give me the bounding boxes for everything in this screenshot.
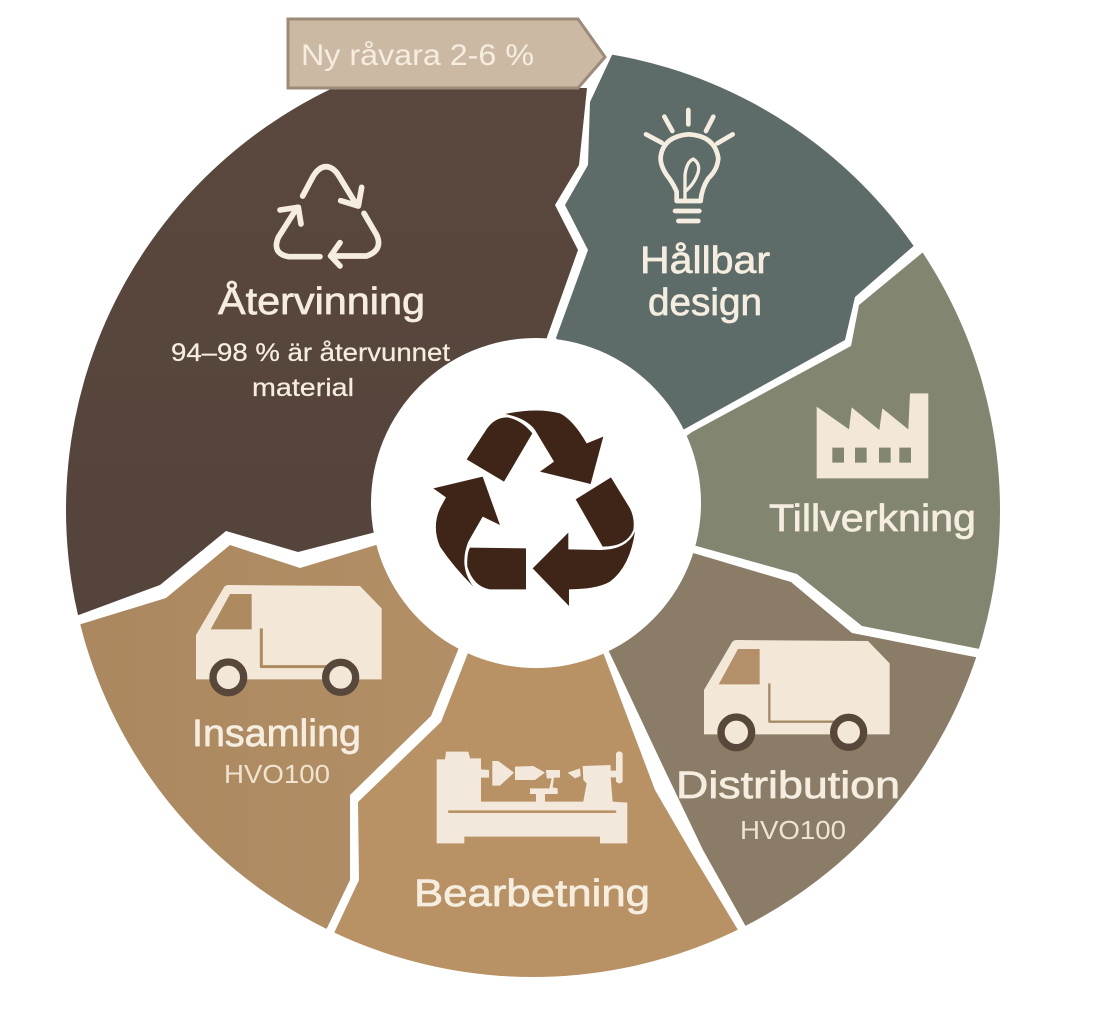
segment wedges — [66, 54, 1000, 977]
heading: Tillverkning: Tillverkning — [769, 498, 976, 540]
panel: Hållbar design wedge — [556, 54, 914, 430]
heading: Hållbar design: Hållbar — [640, 240, 770, 282]
text: HVO100 collection: HVO100 — [224, 759, 330, 789]
center white circle — [371, 338, 701, 668]
icon: van distribution — [704, 640, 890, 748]
icon: lathe — [437, 751, 627, 843]
heading: Hållbar design — [640, 240, 770, 324]
banner: Ny råvara: Ny råvara 2-6 % — [301, 39, 534, 72]
panel: Distribution wedge — [608, 553, 976, 926]
heading: Återvinning: Återvinning — [218, 279, 425, 323]
heading: Bearbetning: Bearbetning — [414, 873, 650, 915]
heading: Hållbar design: design — [648, 282, 762, 324]
icon: central recycling symbol — [433, 410, 635, 606]
panel: Bearbetning wedge — [334, 653, 738, 977]
panel: Tillverkning wedge — [686, 252, 1000, 649]
icon: factory — [817, 393, 928, 478]
banner: Ny råvara — [288, 19, 605, 88]
text: recycled share: material — [252, 374, 354, 402]
text: recycled share — [171, 339, 450, 402]
icon: recycle outline — [276, 167, 379, 266]
heading: Distribution: Distribution — [676, 765, 900, 807]
panel: Insamling wedge — [80, 544, 458, 929]
icon: van collection — [196, 585, 382, 693]
text: HVO100 distribution: HVO100 — [740, 815, 846, 845]
panel: Återvinning wedge — [66, 88, 587, 616]
text: recycled share: 94–98 % är återvunnet — [171, 339, 450, 367]
icon: light bulb — [646, 110, 733, 221]
heading: Insamling: Insamling — [192, 713, 361, 755]
